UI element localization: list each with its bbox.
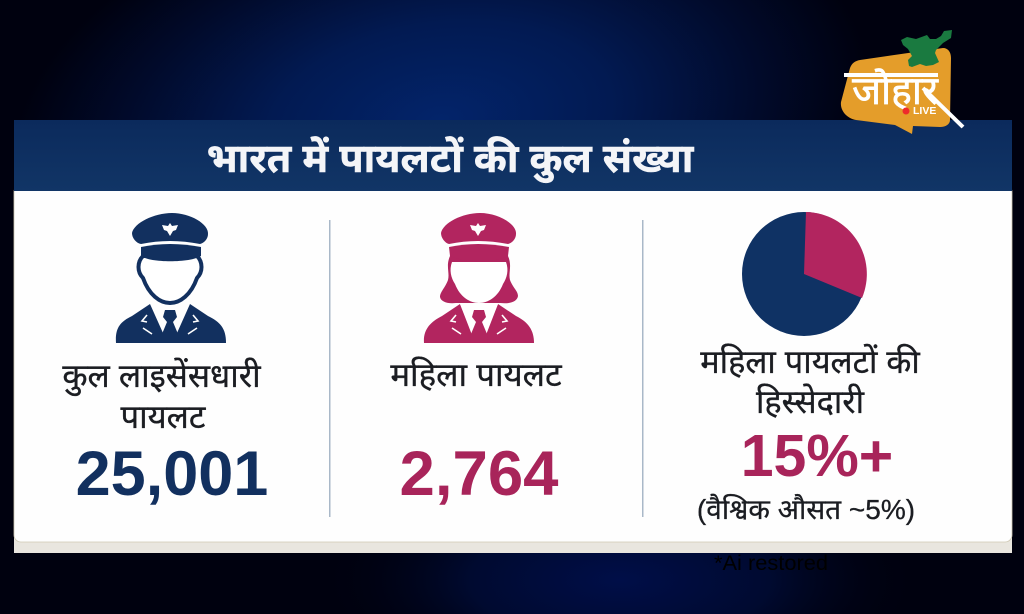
jacket	[116, 304, 226, 343]
title: भारत में पायलटों की कुल संख्या	[207, 136, 695, 183]
label: women share line 2: हिस्सेदारी	[756, 384, 865, 420]
hat brim	[141, 244, 201, 261]
logo slash	[923, 88, 963, 127]
number: 2,764: 2,764	[400, 439, 558, 509]
hat crown	[441, 213, 516, 244]
divider right	[642, 220, 644, 517]
hat badge	[470, 223, 486, 236]
icon: female pilot	[424, 213, 534, 343]
head	[138, 256, 202, 303]
panel: card	[14, 120, 1012, 553]
header band	[14, 120, 1012, 191]
logo text: जोहार	[852, 69, 939, 113]
logo	[841, 30, 963, 134]
hair	[440, 254, 518, 303]
shirt	[460, 304, 498, 335]
note: global average: (वैश्विक औसत ~5%)	[697, 493, 915, 525]
lapel marks	[451, 315, 507, 334]
hat badge	[162, 223, 178, 236]
divider left	[329, 220, 330, 517]
label: women pilots: महिला पायलट	[390, 356, 563, 393]
face	[451, 262, 507, 303]
label: total pilots: कुल लाइसेंसधारी	[62, 357, 261, 396]
tie	[470, 310, 488, 343]
logo bubble	[841, 48, 951, 134]
hat crown	[132, 213, 208, 244]
icon: male pilot	[116, 213, 226, 343]
lapel marks	[142, 315, 198, 334]
logo live text: LIVE	[913, 105, 936, 117]
number: 15%+: 15%+	[741, 423, 893, 489]
logo live dot	[902, 108, 910, 114]
pie chart	[742, 212, 867, 336]
logo map	[901, 30, 952, 67]
number: 25,001: 25,001	[76, 439, 268, 509]
jacket	[424, 304, 534, 343]
caption: *Ai restored	[714, 552, 828, 575]
label: total pilots line 2: पायलट	[121, 398, 206, 435]
label: women share: महिला पायलटों की	[700, 343, 920, 380]
tie	[161, 310, 179, 343]
hat brim	[449, 244, 509, 261]
logo bar	[844, 73, 938, 77]
